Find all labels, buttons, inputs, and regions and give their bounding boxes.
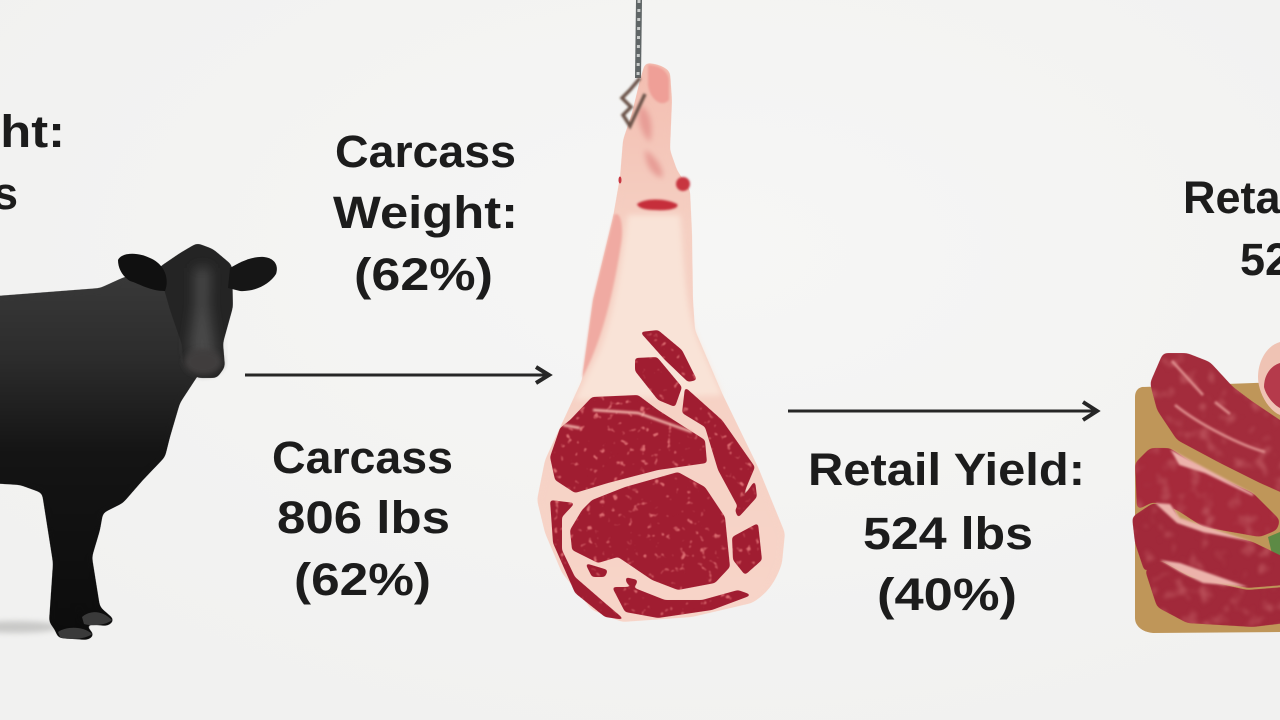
cow hooves: [58, 612, 112, 639]
right lobe: [732, 523, 762, 575]
carcass red marks: [637, 200, 678, 210]
icon: hanging carcass: [537, 63, 785, 622]
thin sliver: [735, 480, 757, 518]
cow snout: [184, 349, 222, 375]
steak 4: [1145, 560, 1280, 627]
cow right ear: [228, 257, 277, 291]
ribeye fat seam: [563, 410, 692, 432]
carcass pale centre: [575, 215, 722, 400]
text: carcass pounds label: (62%): [294, 554, 431, 605]
bottom rim: [612, 587, 752, 618]
icon: retail cuts on board: [1132, 342, 1280, 633]
text: carcass weight label: [333, 126, 518, 300]
small piece two: [625, 577, 638, 587]
carcass pink side band: [582, 214, 622, 378]
upper cluster: [635, 357, 682, 407]
cow face blaze: [189, 268, 215, 362]
carcass upper stains: [639, 105, 663, 178]
ribeye marbled muscles: [550, 330, 762, 620]
text: carcass pounds label: [272, 432, 453, 605]
text: carcass weight label: Weight:: [333, 187, 518, 238]
green garnish: [1268, 532, 1280, 558]
text: retail yield label: 524 lbs: [863, 508, 1033, 559]
round cut meat: [1264, 363, 1280, 408]
text: carcass pounds label: 806 lbs: [277, 492, 450, 543]
steak 4 fat wedge: [1160, 560, 1248, 587]
left rim: [550, 500, 625, 620]
carcass outline: [537, 63, 785, 622]
steak 1: [1150, 353, 1280, 505]
text: retail yield label: (40%): [877, 569, 1017, 620]
text: carcass weight label: (62%): [354, 249, 493, 300]
arrow: carcass to retail: [788, 402, 1097, 420]
diagonal band: [682, 387, 755, 507]
text: retail yield label: Retail Yield:: [808, 444, 1085, 495]
upper left muscle: [550, 395, 707, 493]
top narrow strip: [640, 330, 697, 382]
steaks: [1132, 353, 1280, 627]
text: live weight label (cropped): [0, 106, 65, 219]
wooden board: [1135, 382, 1280, 633]
small piece one: [585, 563, 608, 577]
round cut: [1258, 342, 1280, 415]
arrow: cow to carcass: [245, 367, 549, 383]
steak 3: [1132, 503, 1280, 588]
text: retail yield label: [808, 444, 1085, 620]
centre eye muscle: [570, 472, 730, 590]
cow body: [0, 265, 230, 640]
icon: hook and chain: [622, 0, 645, 126]
text: carcass weight label: Carcass: [335, 126, 516, 177]
text: carcass pounds label: Carcass: [272, 432, 453, 483]
steak 3 fat wedge: [1155, 503, 1253, 542]
cow left ear: [118, 254, 167, 291]
steak 2 fat wedge: [1173, 452, 1253, 495]
steak 1 fat lines: [1172, 361, 1265, 452]
steak 2: [1135, 448, 1280, 537]
text: retail label (cropped): [1183, 172, 1280, 285]
cow head: [158, 243, 233, 378]
carcass top pink: [648, 65, 669, 103]
icon: black cow: [0, 243, 277, 640]
